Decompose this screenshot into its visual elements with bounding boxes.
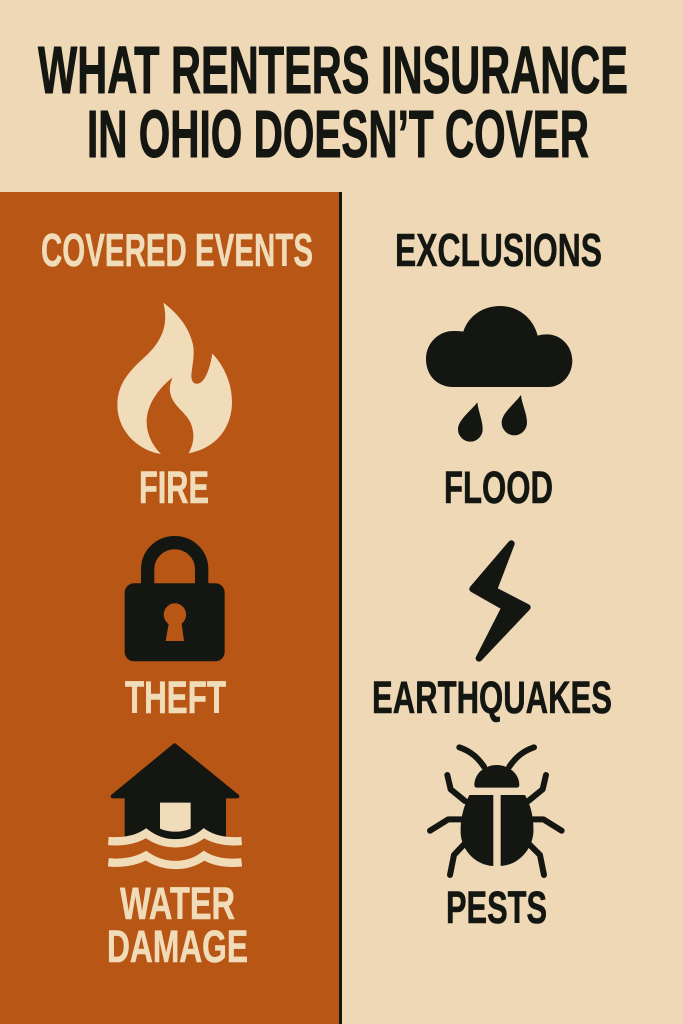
heading: covered events: COVERED EVENTS	[41, 224, 313, 276]
label: water damage: WATER	[120, 878, 235, 929]
label: flood: FLOOD	[444, 462, 553, 513]
label: theft: THEFT	[125, 672, 226, 723]
icon: flooded house	[108, 745, 242, 865]
label: water damage	[107, 878, 248, 972]
center divider	[339, 192, 342, 1024]
panel: exclusions	[372, 224, 612, 933]
label: pests: PESTS	[446, 882, 547, 933]
panel: covered events	[0, 192, 339, 1024]
title	[38, 33, 628, 172]
label: water damage: DAMAGE	[107, 921, 248, 972]
icon: padlock	[125, 543, 225, 661]
icon: lightning bolt	[473, 544, 527, 658]
label: fire: FIRE	[139, 462, 209, 513]
icon: rain cloud	[426, 306, 572, 442]
icon: fire	[117, 303, 232, 454]
icon: beetle	[430, 747, 562, 875]
